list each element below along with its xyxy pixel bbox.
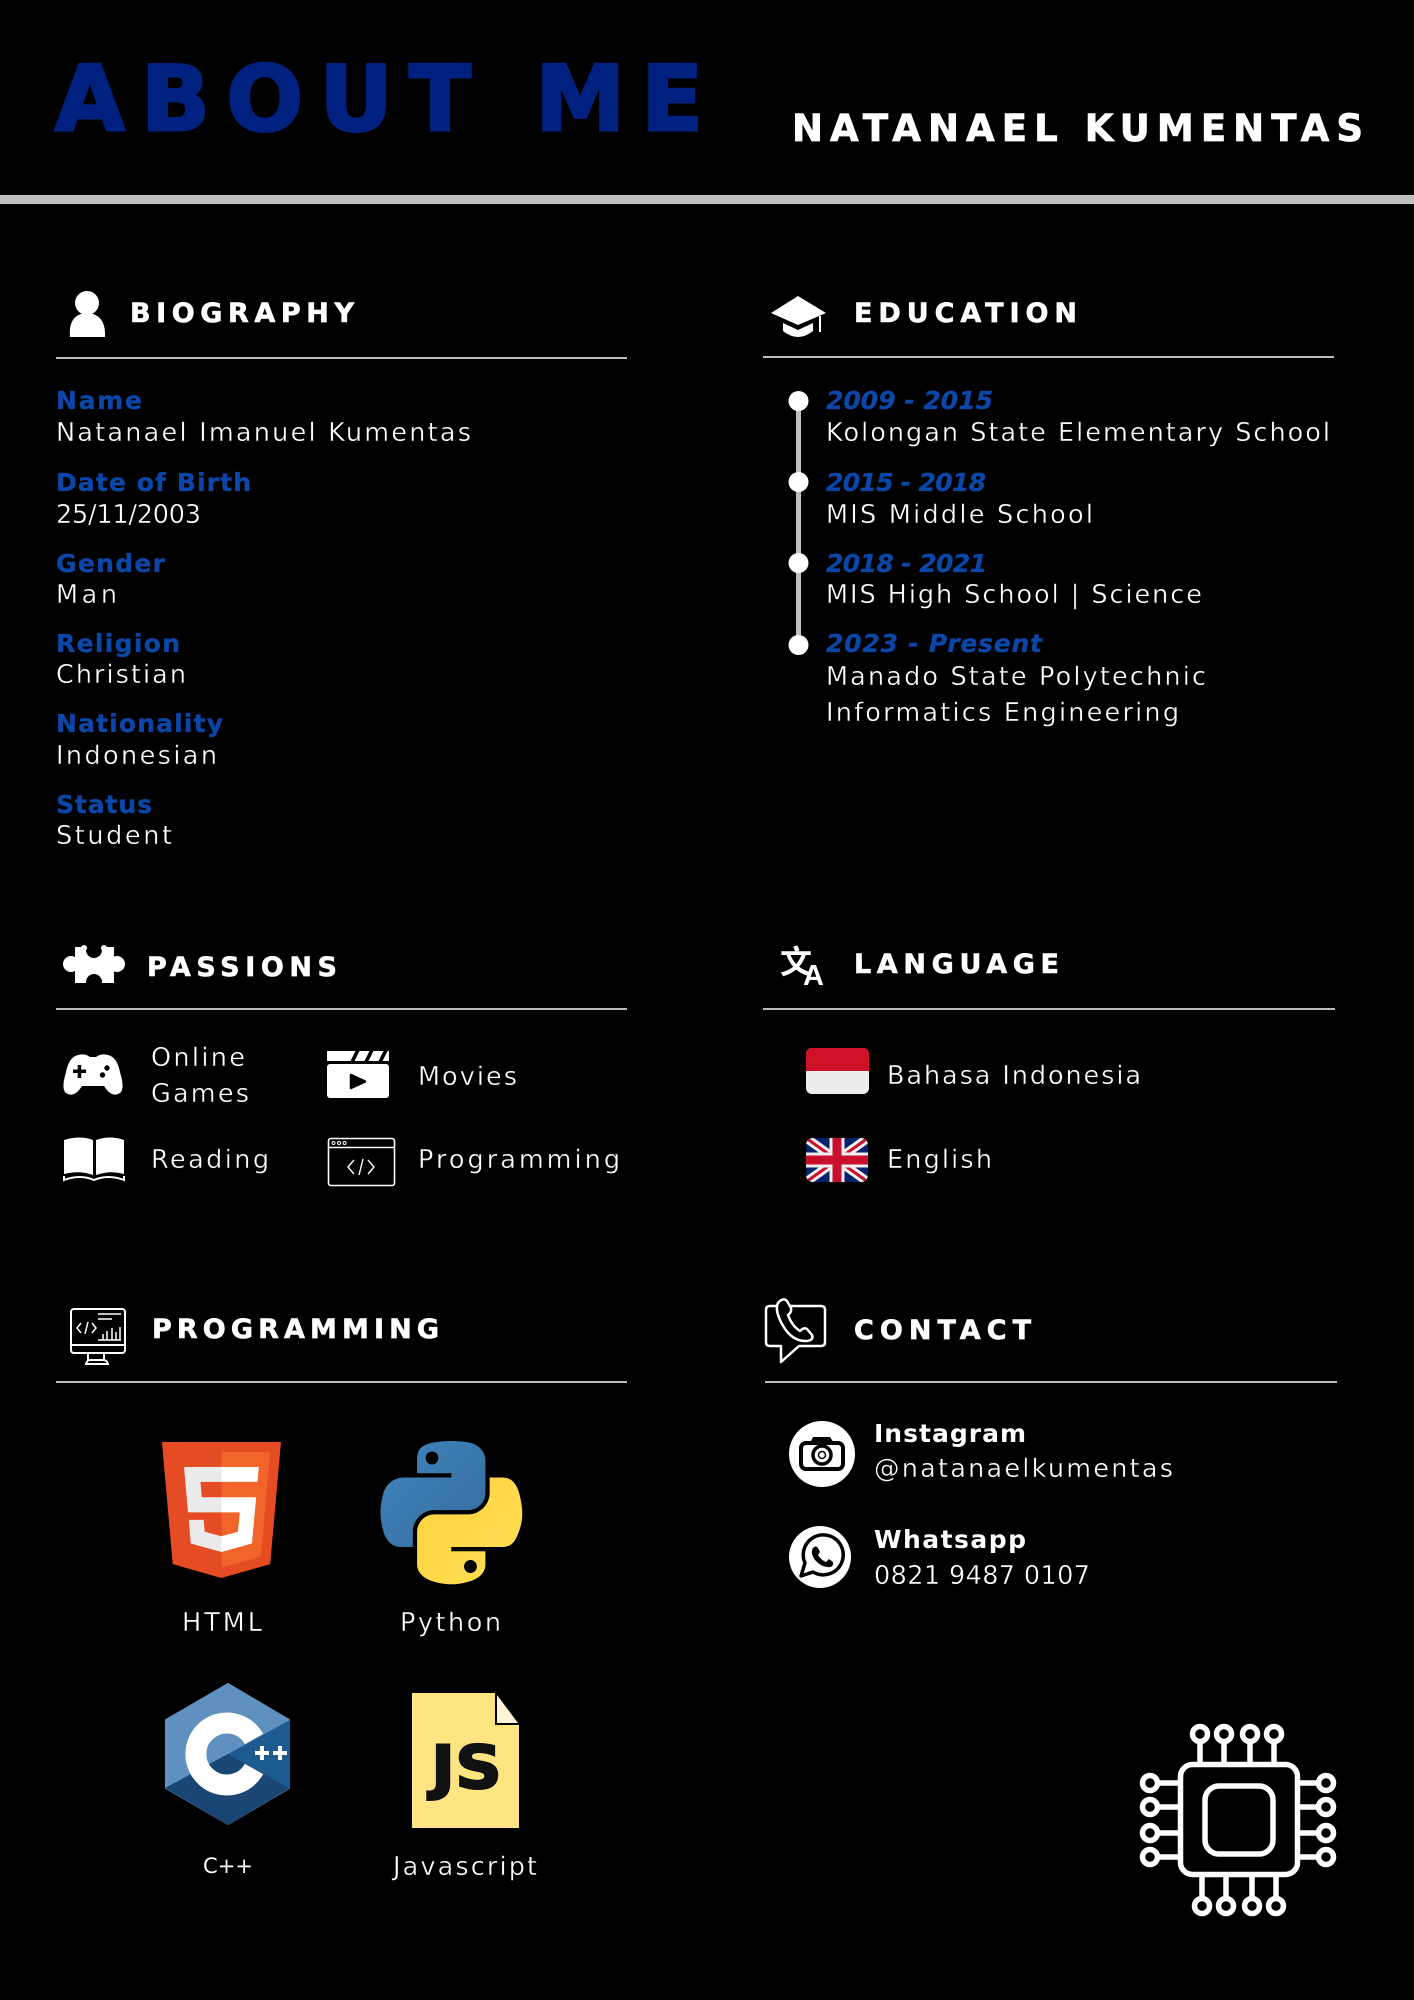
timeline [788,391,808,655]
item: whatsapp: 0821 9487 0107 [874,1561,1090,1591]
item: english [806,1138,992,1182]
panel: biography [56,291,627,851]
item: english: English [887,1145,992,1175]
item: instagram [789,1419,1173,1487]
panel: education [763,296,1334,728]
item: programming: Programming [418,1145,620,1175]
field: date of birth: Date of Birth [56,468,251,497]
field: status: Status [56,790,152,819]
icon: monitor code [71,1309,125,1364]
entry: high school: MIS High School | Science [826,580,1202,610]
field: name: Natanael Imanuel Kumentas [56,418,471,448]
icon: phone chat [766,1299,825,1362]
icon: translate [780,937,824,992]
field: status [56,790,172,851]
logo: python: Python [400,1608,501,1638]
item: instagram: @natanaelkumentas [874,1454,1173,1484]
item: online games: Online [151,1043,245,1073]
title: ABOUT ME [55,47,703,152]
panel: programming [56,1309,627,1882]
item: bahasa indonesia [806,1048,1141,1094]
icon: translate: A [803,960,824,992]
entry: elementary: 2009 - 2015 [826,386,993,415]
logo: c++ [165,1684,290,1878]
logo: javascript [391,1693,537,1882]
icon: translate: 文 [780,937,812,983]
entry: polytechnic: Manado State Polytechnic [826,662,1206,692]
logo: html [162,1442,281,1638]
field: religion: Religion [56,629,180,658]
panel: passions [56,942,627,1186]
item: movies [327,1050,517,1098]
item: instagram: Instagram [874,1419,1026,1448]
field: religion: Christian [56,660,186,690]
item: bahasa indonesia: Bahasa Indonesia [887,1061,1141,1091]
heading: education: EDUCATION [854,298,1077,329]
entry: elementary: Kolongan State Elementary School [826,418,1330,448]
icon: puzzle [63,942,125,990]
entry: polytechnic: Informatics Engineering [826,698,1179,728]
field: nationality: Nationality [56,709,223,738]
heading: contact: CONTACT [854,1315,1032,1346]
entry: polytechnic [826,629,1206,728]
item: movies: Movies [418,1062,517,1092]
entry: polytechnic: 2023 - Present [826,629,1043,658]
field: gender [56,549,166,610]
field: name: Name [56,386,142,415]
logo: html: HTML [182,1608,263,1638]
entry: middle school [826,468,1093,530]
item: programming [328,1138,620,1186]
item: online games [63,1043,249,1109]
item: reading: Reading [151,1145,269,1175]
item: whatsapp: Whatsapp [874,1525,1026,1554]
heading: biography: BIOGRAPHY [130,298,354,329]
logo: python [381,1441,522,1638]
panel: language [763,937,1335,1182]
field: name [56,386,471,448]
item: reading [64,1138,269,1180]
field: status: Student [56,821,172,851]
name: NATANAEL KUMENTAS [792,107,1363,150]
logo: javascript: JS [427,1733,502,1803]
field: date of birth: 25/11/2003 [56,500,201,530]
field: gender: Man [56,580,117,610]
logo: c++: C++ [203,1854,253,1878]
icon: chip [1142,1726,1334,1914]
field: nationality [56,709,223,771]
heading: passions: PASSIONS [147,952,337,983]
icon: person [70,291,105,337]
field: religion [56,629,186,690]
panel: contact [765,1299,1337,1591]
entry: high school: 2018 - 2021 [826,549,987,578]
entry: middle school: MIS Middle School [826,500,1093,530]
field: date of birth [56,468,251,530]
entry: high school [826,549,1202,610]
heading: language: LANGUAGE [854,949,1059,980]
item: whatsapp [789,1525,1090,1591]
item: online games: Games [151,1079,249,1109]
field: nationality: Indonesian [56,741,217,771]
logo: javascript: Javascript [391,1852,537,1882]
heading: programming: PROGRAMMING [152,1314,439,1345]
icon: graduation cap [771,296,826,337]
field: gender: Gender [56,549,166,578]
entry: middle school: 2015 - 2018 [826,468,986,497]
entry: elementary [826,386,1330,448]
